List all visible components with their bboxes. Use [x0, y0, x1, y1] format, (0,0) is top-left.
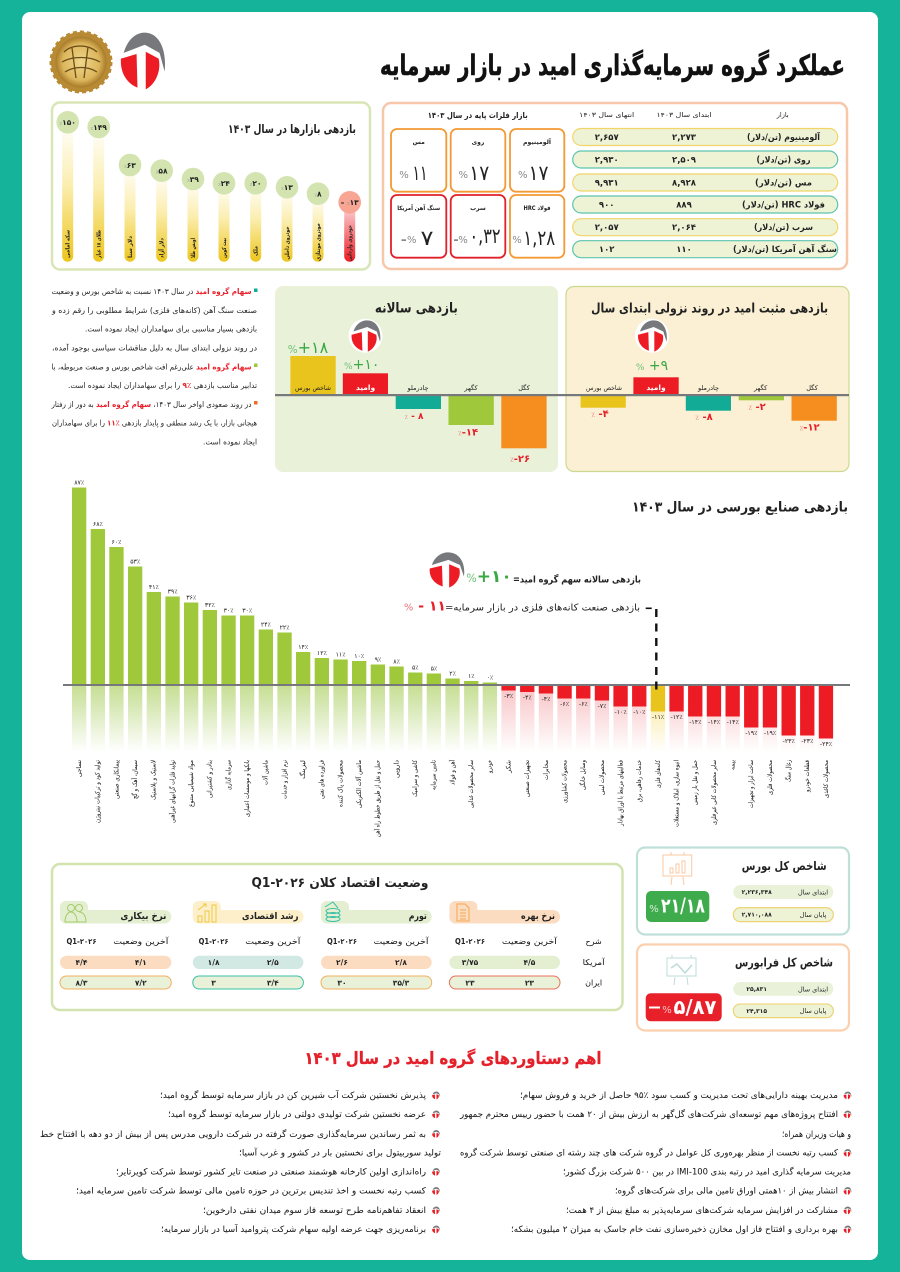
bar values: ۳۰٪	[224, 608, 234, 614]
table headers	[579, 111, 789, 119]
table rows: ۲,۰۶۴	[672, 223, 696, 233]
bar values: ۳۲٪	[205, 602, 215, 609]
list: achievements left: عرضه نخستین شرکت تولیدی دولتی در بازار سرمایه توسط گروه امید؛	[168, 1109, 426, 1120]
index rows	[733, 885, 833, 922]
panel: annual return	[275, 286, 558, 472]
bar values: -۱۰٪	[633, 709, 645, 716]
macro data rows: ۲۳	[525, 978, 534, 988]
group headers: نرخ بیکاری	[120, 911, 166, 922]
metal cards: ۱۱	[412, 161, 428, 185]
value box: %	[662, 1005, 672, 1016]
value circles: ٪۸	[314, 190, 322, 198]
bar chart: annual: ٪-۱۴	[458, 428, 478, 439]
bar values: ۵۳٪	[130, 558, 140, 566]
macro data rows: ۳۵/۳	[393, 978, 410, 988]
metal cards: فولاد HRC	[524, 205, 551, 212]
metal cards: ۱,۲۸	[523, 226, 555, 250]
value circles	[56, 111, 361, 214]
chart: industry returns	[63, 480, 850, 837]
list: achievements right: انتشار بیش از ۱۰همتی اوراق تامین مالی برای شرکت‌های گروه؛	[615, 1186, 838, 1197]
value circles: ٪۱۴۹	[91, 123, 107, 132]
bar labels: اونس طلا	[191, 238, 197, 258]
bar labels: حمل و نقل بار زمینی	[691, 760, 699, 805]
index rows: ابتدای سال	[798, 986, 828, 994]
callout: annual return of Omid	[430, 552, 641, 588]
callout: annual return of Omid: بازدهی سالانه سهم گروه امید=	[513, 574, 641, 586]
group headers: نرخ بهره	[521, 911, 555, 922]
text block: analysis: تدابیر مناسب بازدهی ٪۹ را برای سهامداران ایجاد نموده است.	[68, 381, 257, 390]
panel: OTC index	[637, 944, 849, 1030]
group headers: تورم	[409, 911, 427, 922]
bar labels: بیمه	[728, 760, 736, 770]
bar labels: تولید فلزات گرانبهای غیرآهنی	[167, 760, 176, 823]
heading: achievements: اهم دستاوردهای گروه امید در سال ۱۴۰۳	[304, 1048, 602, 1069]
bar values: ۰٪	[487, 674, 493, 682]
bar labels: حمل و نقل از طریق خطوط راه آهن	[373, 760, 382, 837]
bar labels: فراورده های نفتی	[318, 760, 326, 799]
metal cards: ۷	[420, 226, 434, 250]
heading: positive return: بازدهی مثبت امید در روند نزولی ابتدای سال	[591, 302, 828, 317]
bar values: -۱۹٪	[745, 730, 757, 737]
bar labels: طلای ۱۸ عیار	[97, 230, 103, 259]
bar labels: دارویی	[392, 760, 400, 778]
heading: annual return: بازدهی سالانه	[375, 301, 458, 317]
list: achievements right: مشارکت در افزایش سرمایه شرکت‌های سرمایه‌پذیر به مبلغ بیش از ۴ همت؛	[566, 1206, 838, 1216]
bar labels: دلار سنا	[128, 236, 134, 258]
heading: OTC index: شاخص کل فرابورس	[735, 956, 833, 971]
bar labels: خودروی داخلی	[285, 226, 291, 260]
bar labels	[65, 223, 354, 261]
bar values: -۴٪	[523, 694, 532, 702]
row and column labels: آخرین وضعیت	[245, 936, 301, 946]
bar values: -۱۰٪	[614, 709, 627, 716]
bar values: -۳٪	[504, 693, 513, 700]
bar labels: تامین سرمایه	[430, 760, 438, 790]
callout: metal ores industry return: % - ۱۱	[404, 598, 446, 614]
bar labels: سیمان، آهک و گچ	[130, 760, 139, 799]
list: achievements right: و هیات وزیران همراه؛	[782, 1130, 851, 1140]
value circles: ٪۶۳	[124, 161, 136, 170]
macro data rows: ۳	[211, 978, 216, 988]
bar labels: سایر محصولات کانی غیرفلزی	[710, 760, 718, 825]
value circles: ٪۱۳	[281, 183, 293, 192]
metal cards: ۱۷	[469, 161, 489, 185]
bar labels: وسایل خانگی	[579, 760, 587, 790]
icon: logo	[348, 319, 382, 353]
list: achievements right: مدیریت سرمایه گذاری امید در رتبه بندی IMI-100 در بین ۵۰۰ شرکت بزرگ کشور؛	[563, 1166, 851, 1178]
panel: macro economy	[52, 864, 622, 1010]
row and column labels: Q1-۲۰۲۶	[66, 937, 96, 946]
bar values: ۱۲٪	[317, 650, 327, 657]
bar values: -۱۲٪	[670, 714, 683, 721]
table rows: مس (تن/دلار)	[755, 178, 812, 188]
row and column labels: آمریکا	[583, 957, 605, 967]
icon: board with bars	[663, 852, 692, 885]
table headers: انتهای سال ۱۴۰۳	[579, 111, 634, 119]
bar values: ۱۰٪	[354, 653, 364, 660]
list: achievements left: انعقاد تفاهم‌نامه طرح توسعه فاز سوم میدان نفتی دارخوین؛	[203, 1206, 426, 1216]
metal cards: مس	[413, 139, 425, 146]
bar labels: سرمایه گذاری	[224, 760, 232, 790]
macro data rows: ۳۰	[337, 978, 347, 988]
bar labels: قطعات خودرو	[803, 760, 811, 793]
text block: analysis	[51, 287, 258, 446]
list: achievements right: کسب رتبه نخست از منظر بهره‌وری کل عوامل در گروه شرکت های چند رشته ای صنعتی توسط شرکت گروه	[460, 1148, 839, 1159]
bar values: ۸٪	[393, 658, 400, 666]
bar values: ۵٪	[431, 666, 437, 672]
bar values: ۲٪	[449, 670, 456, 678]
bar values: -۶٪	[560, 701, 569, 708]
bar labels: زغال سنگ	[784, 760, 792, 782]
index rows: ۲۵,۸۳۱	[746, 986, 767, 993]
macro data rows: ۲/۶	[336, 958, 348, 967]
bar labels: ملک	[253, 246, 260, 256]
table rows: فولاد HRC (تن/دلار)	[742, 200, 825, 210]
bar values: ۱۱٪	[336, 652, 346, 658]
table rows: روی (تن/دلار)	[756, 156, 811, 166]
value box	[646, 993, 722, 1021]
bar values: ۱۴٪	[298, 644, 308, 651]
table rows: ۲,۲۷۳	[672, 133, 697, 143]
text block: analysis: سهام گروه امید در سال ۱۴۰۳ نسبت به شاخص بورس و وضعیت	[52, 287, 252, 296]
bar labels	[75, 759, 830, 837]
bar values: ۶۰٪	[112, 539, 121, 546]
row and column labels: Q1-۲۰۲۶	[199, 937, 229, 946]
text block: analysis: صنعت سنگ آهن (کانه‌های فلزی) شرایط مطلوبی را رقم زده و	[51, 305, 257, 315]
bar labels: تولید کود و ترکیبات نیتروژن	[94, 760, 102, 823]
row and column labels: Q1-۲۰۲۶	[327, 937, 357, 946]
list: achievements right: مدیریت بهینه دارایی‌های تحت مدیریت و کسب سود ٪۹۵ حاصل از خرید و فروش سهام؛	[520, 1091, 838, 1101]
bar values: -۱۴٪	[708, 719, 720, 726]
bar values: -۱۴٪	[727, 719, 739, 726]
bar chart: start of year: ٪ -۸	[695, 412, 713, 423]
callout: metal ores industry return: بازدهی صنعت کانه‌های فلزی در بازار سرمایه=	[445, 603, 640, 614]
icon: board with line	[667, 955, 696, 985]
table rows: سرب (تن/دلار)	[754, 223, 813, 233]
bar labels: تجهیزات صنعتی	[523, 760, 531, 797]
bar values: -۱۴٪	[689, 719, 701, 726]
bar labels: خودرو	[486, 760, 494, 774]
callout: annual return of Omid: %+۱۰	[466, 567, 512, 587]
icon: coins	[325, 902, 340, 922]
table rows: ۲,۹۳۰	[595, 156, 619, 166]
table rows: ۹۰۰	[599, 200, 614, 210]
bar labels: خدمات رفاهی، برق	[635, 760, 643, 802]
table rows: ۲,۵۰۹	[672, 156, 697, 166]
value box: ۲۱/۱۸	[661, 894, 705, 918]
list: achievements right: بهره برداری و افتتاح فاز اول مخازن ذخیره‌سازی نفت خام جاسک به میزان ۲ میلیون بشکه؛	[511, 1225, 838, 1235]
bar chart: annual: وامید	[356, 383, 375, 392]
table headers: بازار	[776, 111, 789, 119]
row and column labels: شرح	[585, 937, 602, 946]
text block: analysis: در روند صعودی اواخر سال ۱۴۰۳، سهام گروه امید به دور از رفتار	[51, 400, 252, 409]
bar values: ۳۰٪	[242, 608, 252, 614]
bar labels: بانکها و موسسات اعتباری	[243, 760, 251, 817]
value circles: ٪۲۴	[218, 179, 230, 188]
table rows: ۱۰۲	[599, 245, 615, 255]
row and column labels: ایران	[585, 979, 602, 988]
macro data rows: ۳/۷۵	[462, 958, 479, 967]
index rows: پایان سال	[800, 1007, 826, 1015]
bar chart: annual: چادرملو	[406, 384, 429, 392]
icon: people	[65, 904, 86, 922]
bar labels: انبوه سازی، املاک و مستغلات	[672, 760, 680, 827]
metal cards: %	[512, 235, 522, 246]
panel: market returns	[52, 102, 370, 270]
heading: industry returns: بازدهی صنایع بورسی در سال ۱۴۰۳	[632, 500, 848, 516]
bar chart: start of year	[581, 358, 837, 434]
bar chart: start of year: کگهر	[753, 384, 768, 392]
table rows: آلومینیوم (تن/دلار)	[747, 131, 821, 143]
metal cards: %	[399, 170, 409, 181]
index rows: پایان سال	[800, 911, 826, 919]
text block: analysis: هیجانی بازار، با یک رشد منطقی و پایدار بازدهی ٪۱۱ را برای سهامداران	[52, 418, 257, 428]
bar labels: لیزینگ	[299, 760, 307, 779]
macro data rows: ۲۳	[465, 978, 475, 988]
bar labels: محصولات لبنی	[598, 760, 606, 795]
macro data rows: ۲/۸	[395, 958, 407, 967]
icon: logo	[635, 319, 669, 353]
row and column labels: آخرین وضعیت	[374, 936, 429, 946]
bar values: -۲۳٪	[801, 738, 813, 745]
bar labels: بنادر و کشتیرانی	[206, 760, 214, 798]
table rows: ۲,۶۵۷	[595, 133, 620, 143]
bar labels: محصولات فلزی	[766, 760, 774, 795]
bar values	[74, 480, 832, 748]
bar labels: محصولات پاک کننده	[336, 760, 344, 807]
table headers: ابتدای سال ۱۴۰۳	[656, 111, 712, 119]
bar labels: ماشین آلات	[261, 760, 270, 785]
bar chart: start of year: کگل	[806, 384, 819, 392]
bar values: -۱۹٪	[764, 730, 776, 737]
heading: base metals: بازار فلزات پایه در سال ۱۴۰۳	[428, 111, 528, 120]
macro data rows: ۴/۴	[76, 958, 88, 967]
bar labels: ساخت ابزار و تجهیزات	[747, 760, 755, 808]
panel: positive return in downtrend	[566, 286, 849, 472]
list: achievements left: به ثمر رساندین سرمایه‌گذاری صورت گرفته در شرکت دارویی مدرس پس از بیش از دو دهه با افتتاح خط	[40, 1129, 426, 1140]
bar chart: start of year: % +۹	[636, 358, 668, 374]
bar values: -۲۴٪	[820, 741, 832, 748]
bar chart: start of year: ٪ -۴	[591, 409, 609, 420]
bar values: ۸۷٪	[74, 480, 84, 486]
bar labels: کانه‌های فلزی	[654, 759, 662, 788]
panel: total index	[637, 848, 849, 934]
macro data rows: ۴/۵	[523, 958, 536, 967]
bar chart: annual: کگل	[518, 384, 531, 392]
macro data rows: ۴/۱	[135, 958, 147, 967]
bar values: ۳۹٪	[168, 588, 178, 596]
macro data rows: ۲/۵	[267, 958, 279, 967]
bar values: -۶٪	[579, 701, 588, 708]
callout: metal ores industry return	[404, 598, 656, 690]
bar values: ۲۲٪	[280, 624, 290, 632]
negative bars	[501, 684, 833, 738]
table rows	[573, 128, 838, 258]
metal cards: %	[407, 235, 416, 246]
metal cards: %	[458, 235, 468, 246]
bar values: -۷٪	[598, 703, 606, 710]
bar columns	[62, 122, 355, 262]
value circles: ٪۳۹	[187, 175, 199, 184]
bar reflections	[72, 686, 833, 752]
table rows: ۲,۰۵۷	[595, 223, 620, 233]
bar chart: start of year: ٪ -۲	[748, 402, 766, 413]
table rows: ۱۱۰	[676, 245, 692, 255]
bar values: -۴٪	[542, 696, 550, 703]
icon: gold seal	[51, 32, 111, 92]
axis	[63, 684, 850, 686]
bar values: -۱۱٪	[652, 714, 664, 721]
value box: %	[649, 904, 659, 915]
metal cards: ۰,۳۲	[470, 224, 500, 248]
index rows	[733, 982, 833, 1018]
bar values: ۱٪	[468, 673, 475, 680]
table rows: ۸۸۹	[676, 200, 693, 210]
metal cards: سنگ آهن آمریکا	[397, 203, 440, 212]
bar values: ۳۶٪	[186, 594, 196, 602]
bar chart: annual: ٪-۲۶	[510, 454, 530, 465]
bar labels: ماشین آلات الکتریکی	[354, 760, 363, 808]
list: achievements left: برنامه‌ریزی جهت عرضه اولیه سهام شرکت پتروامید آسیا در بازار سرمایه؛	[161, 1223, 426, 1235]
value box	[646, 891, 709, 922]
list: achievements left: راه‌اندازی اولین کارخانه هوشمند صنعتی در صنعت تایر کشور توسط شرکت کویرتایر؛	[116, 1168, 426, 1178]
metal cards: ۱۷	[528, 161, 548, 185]
bar labels: خودروی مونتاژی	[316, 223, 322, 261]
bar labels: لاستیک و پلاستیک	[150, 760, 158, 800]
icon: growth chart	[198, 904, 216, 922]
bar labels: کاشی و سرامیک	[411, 759, 419, 797]
text block: analysis: در روند نزولی ابتدای سال به دلیل مناقشات سیاسی بوجود آمده،	[52, 342, 257, 352]
bar labels: سکه امامی	[65, 230, 72, 258]
text block: analysis: سهام گروه امید علی‌رغم افت شاخص بورس و صنعت مربوطه، با	[52, 362, 252, 372]
bar chart: annual	[288, 338, 547, 465]
metal cards: سرب	[470, 205, 486, 212]
index rows: ۲۴,۳۱۵	[746, 1008, 767, 1015]
bar labels: آهن و فولاد	[447, 759, 456, 785]
value circles: ٪۱۵۰	[60, 118, 76, 127]
macro data rows: ۸/۳	[76, 978, 88, 988]
list: achievements left: کسب رتبه نخست و اخذ تندیس برترین در حوزه تامین مالی توسط شرکت تامین سرمایه امید؛	[76, 1187, 427, 1197]
bar chart: annual: %+۱۸	[288, 338, 329, 357]
bar values: ۶۸٪	[93, 521, 103, 528]
bar labels: نساجی	[75, 760, 83, 777]
table rows: ۹,۹۳۱	[595, 178, 619, 188]
bar values: ۹٪	[375, 656, 381, 664]
bar chart: annual: شاخص بورس	[295, 384, 331, 392]
row and column labels: آخرین وضعیت	[113, 936, 169, 946]
bar labels: محصولات کشاورزی	[560, 760, 568, 803]
bar chart: start of year: چادرملو	[697, 384, 719, 392]
macro data rows: ۳/۴	[267, 978, 279, 988]
bar chart: annual: ٪ - ۸	[405, 412, 424, 422]
panel: base metals	[383, 103, 847, 269]
bar labels: مواد شیمیایی متنوع	[187, 760, 195, 807]
list: achievements left	[40, 1089, 442, 1235]
metal cards: %	[459, 170, 468, 181]
bar values: ۲۴٪	[261, 622, 271, 628]
bar chart: start of year: ٪-۱۲	[800, 423, 820, 434]
value box: ۵/۸۷	[674, 995, 716, 1019]
bar chart: annual: کگهر	[463, 384, 479, 392]
bar chart: start of year: وامید	[646, 383, 666, 392]
icon: document	[457, 904, 469, 921]
bar chart: annual: %+۱۰	[344, 357, 379, 373]
bar labels: دلار آزاد	[158, 238, 166, 258]
macro data rows	[60, 956, 560, 989]
index rows: ابتدای سال	[798, 888, 828, 896]
text block: analysis: ایجاد نموده است.	[203, 438, 257, 446]
bar labels: محصولات کاغذی	[822, 760, 830, 798]
macro data rows: ۷/۲	[135, 978, 147, 988]
macro data rows: ۱/۸	[208, 958, 220, 967]
row and column labels	[66, 936, 605, 988]
index rows: ۲,۲۳۶,۳۴۸	[742, 889, 772, 896]
metal cards: آلومینیوم	[523, 137, 552, 146]
group headers	[60, 901, 560, 924]
heading: market returns: بازدهی بازارها در سال ۱۴۰۳	[228, 122, 356, 136]
list: achievements right: افتتاح پروژه‌های مهم توسعه‌ای شرکت‌های گل‌گهر به ارزش بیش از ۲۰ همت با حضور رییس محترم جمهور	[459, 1109, 838, 1120]
positive bars	[72, 488, 497, 684]
bar values: ۵٪	[412, 664, 419, 672]
bar values: -۲۳٪	[783, 738, 795, 745]
bar labels: شکر	[504, 760, 512, 774]
bar labels: فعالیتهای مرتبط با اوراق بهادار	[616, 760, 624, 827]
bar values: ۴۱٪	[149, 584, 159, 591]
group headers: رشد اقتصادی	[242, 911, 298, 922]
bar labels: نرم افزار و خدمات	[280, 760, 288, 799]
row and column labels: آخرین وضعیت	[502, 936, 558, 946]
metal cards: %	[518, 170, 527, 181]
bar labels: خودروی وارداتی	[348, 225, 354, 261]
heading: total index: شاخص کل بورس	[742, 859, 827, 874]
value circles: ٪۲۰	[250, 179, 262, 188]
text block: analysis: بازدهی بسیار مناسبی برای سهامداران ایجاد نموده است.	[85, 325, 257, 334]
bar labels: سایر محصولات غذایی	[467, 760, 475, 808]
heading: macro economy: وضعیت اقتصاد کلان ۲۰۲۶-Q1	[252, 876, 428, 891]
list: achievements left: تولید سوربیتول برای نخستین بار در کشور و غرب آسیا؛	[239, 1147, 442, 1159]
list: achievements left: پذیرش نخستین شرکت آب شیرین کن در بازار سرمایه توسط گروه امید؛	[160, 1089, 427, 1101]
value circles: – ٪۱۳	[341, 198, 359, 207]
row and column labels: Q1-۲۰۲۶	[455, 937, 485, 946]
list: achievements right	[459, 1091, 851, 1235]
bar chart: start of year: شاخص بورس	[586, 384, 622, 392]
bar labels: مخابرات	[542, 760, 550, 780]
bar labels: بیت کوین	[221, 238, 228, 258]
metal cards	[391, 129, 564, 258]
value circles: ٪۵۸	[156, 166, 168, 176]
table rows: سنگ آهن آمریکا (تن/دلار)	[733, 243, 837, 255]
bar labels: پیمانکاری صنعتی	[112, 760, 120, 799]
index rows: ۲,۷۱۰,۰۸۸	[742, 912, 772, 918]
metal cards: روی	[472, 139, 485, 146]
table rows: ۸,۹۲۸	[672, 178, 697, 188]
icon: company logo	[121, 33, 165, 89]
